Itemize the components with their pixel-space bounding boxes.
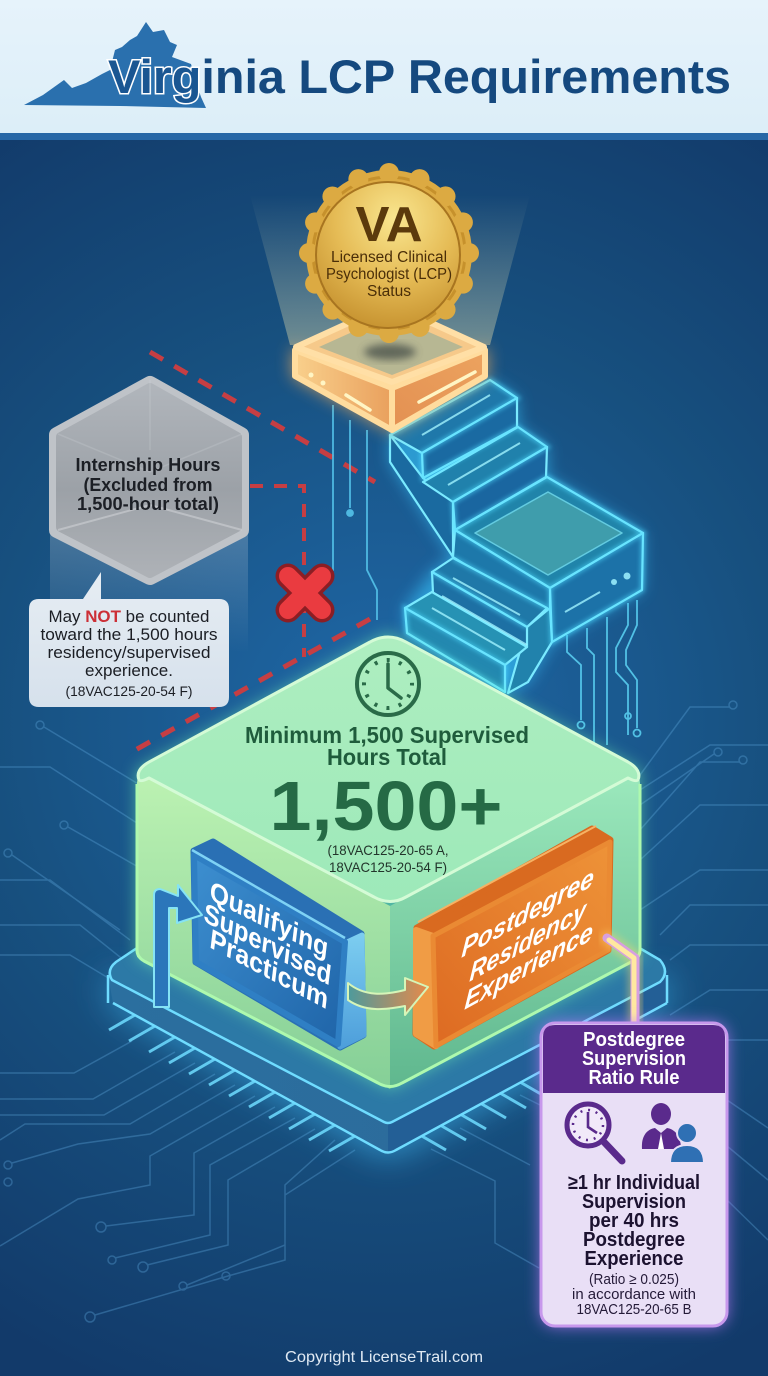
rule citation: (Ratio ≥ 0.025) xyxy=(589,1271,679,1288)
card: qualifying supervised practicum: Supervised xyxy=(202,898,333,992)
icon: red X outline xyxy=(288,576,322,610)
medal: VA LCP status: Psychologist (LCP) xyxy=(326,266,452,283)
circuit traces below stairs xyxy=(567,600,640,745)
regulation citations: 18VAC125-20-54 F) xyxy=(329,859,447,875)
heading: minimum hours xyxy=(245,722,529,770)
internship hours hexagon xyxy=(57,380,242,580)
arrow: practicum to residency xyxy=(348,978,428,1015)
header band xyxy=(0,0,768,140)
card: postdegree residency experience: Residency xyxy=(468,894,589,989)
rule citation: in accordance with xyxy=(572,1286,696,1303)
panel heading: Postdegree xyxy=(583,1029,685,1051)
callout: not counted note: (18VAC125-20-54 F) xyxy=(66,683,192,699)
hexagon text: 1,500-hour total) xyxy=(77,494,219,514)
green block glow xyxy=(137,633,640,1089)
icon: red X fill xyxy=(288,576,322,610)
stair edge glow xyxy=(390,380,643,692)
medal: VA LCP status: Status xyxy=(367,283,411,300)
bright circuit spokes xyxy=(109,1015,566,1151)
light beam behind medal xyxy=(250,195,530,345)
gold platform xyxy=(292,304,488,433)
rule text: Postdegree xyxy=(583,1229,685,1251)
title: Virginia LCP Requirements xyxy=(108,50,731,103)
rule text: per 40 hrs xyxy=(589,1210,679,1232)
red dashed exclusion lines xyxy=(130,352,375,753)
base plate xyxy=(108,946,667,1155)
regulation citations: (18VAC125-20-65 A, xyxy=(328,842,448,858)
callout: not counted note: toward the 1,500 hours xyxy=(40,625,218,644)
callout: not counted note: experience. xyxy=(85,661,173,680)
medal: VA LCP status: VA xyxy=(356,198,422,252)
card: qualifying supervised practicum xyxy=(192,842,364,1047)
heading: minimum hours: Minimum 1,500 Supervised xyxy=(245,722,529,748)
card: postdegree residency experience: Experience xyxy=(463,916,594,1017)
regulation citations xyxy=(328,842,448,875)
medal: VA LCP status: Licensed Clinical xyxy=(331,249,447,266)
rule citation xyxy=(572,1271,696,1318)
callout: not counted note: residency/supervised xyxy=(48,643,211,662)
card: postdegree residency experience xyxy=(416,826,610,1046)
hexagon text: Internship Hours xyxy=(76,455,220,475)
panel heading: Ratio Rule xyxy=(588,1067,680,1089)
card: postdegree residency experience: Postdegree xyxy=(460,862,595,965)
callout: not counted note: May NOT be counted xyxy=(48,607,210,626)
icon: Virginia state map xyxy=(24,22,206,108)
circuit traces below gold platform xyxy=(323,405,377,620)
panel heading xyxy=(582,1029,686,1089)
hexagon text: (Excluded from xyxy=(84,475,212,495)
internship fade beam xyxy=(50,533,248,653)
rule text xyxy=(568,1172,700,1270)
rule text: Supervision xyxy=(582,1191,686,1213)
card: qualifying supervised practicum: Qualifying xyxy=(208,876,330,965)
purple box glow xyxy=(541,1023,727,1326)
hexagon text xyxy=(76,455,220,514)
icon: supervisor and supervisee xyxy=(642,1103,704,1163)
background circuit traces xyxy=(0,701,768,1322)
connector pipe to ratio rule xyxy=(607,938,635,1022)
icon: clock xyxy=(357,653,419,715)
arrow: into practicum xyxy=(154,885,202,1007)
heading: minimum hours: Hours Total xyxy=(327,744,447,770)
rule citation: 18VAC125-20-65 B xyxy=(576,1301,692,1318)
green requirement block xyxy=(137,637,640,1089)
icon: magnifier clock xyxy=(567,1104,622,1161)
stair glow xyxy=(390,380,643,693)
panel: supervision ratio rule xyxy=(541,1023,727,1326)
rule text: Experience xyxy=(584,1248,684,1270)
staircase xyxy=(390,380,643,693)
base plate glow xyxy=(108,975,667,1155)
panel heading: Supervision xyxy=(582,1048,686,1070)
card: qualifying supervised practicum: Practicum xyxy=(208,924,330,1016)
callout: not counted note xyxy=(29,572,229,707)
medal: VA LCP status xyxy=(306,170,472,336)
rule text: ≥1 hr Individual xyxy=(568,1172,700,1194)
big number: 1,500+ xyxy=(270,767,502,845)
copyright: Copyright LicenseTrail.com xyxy=(285,1349,483,1366)
